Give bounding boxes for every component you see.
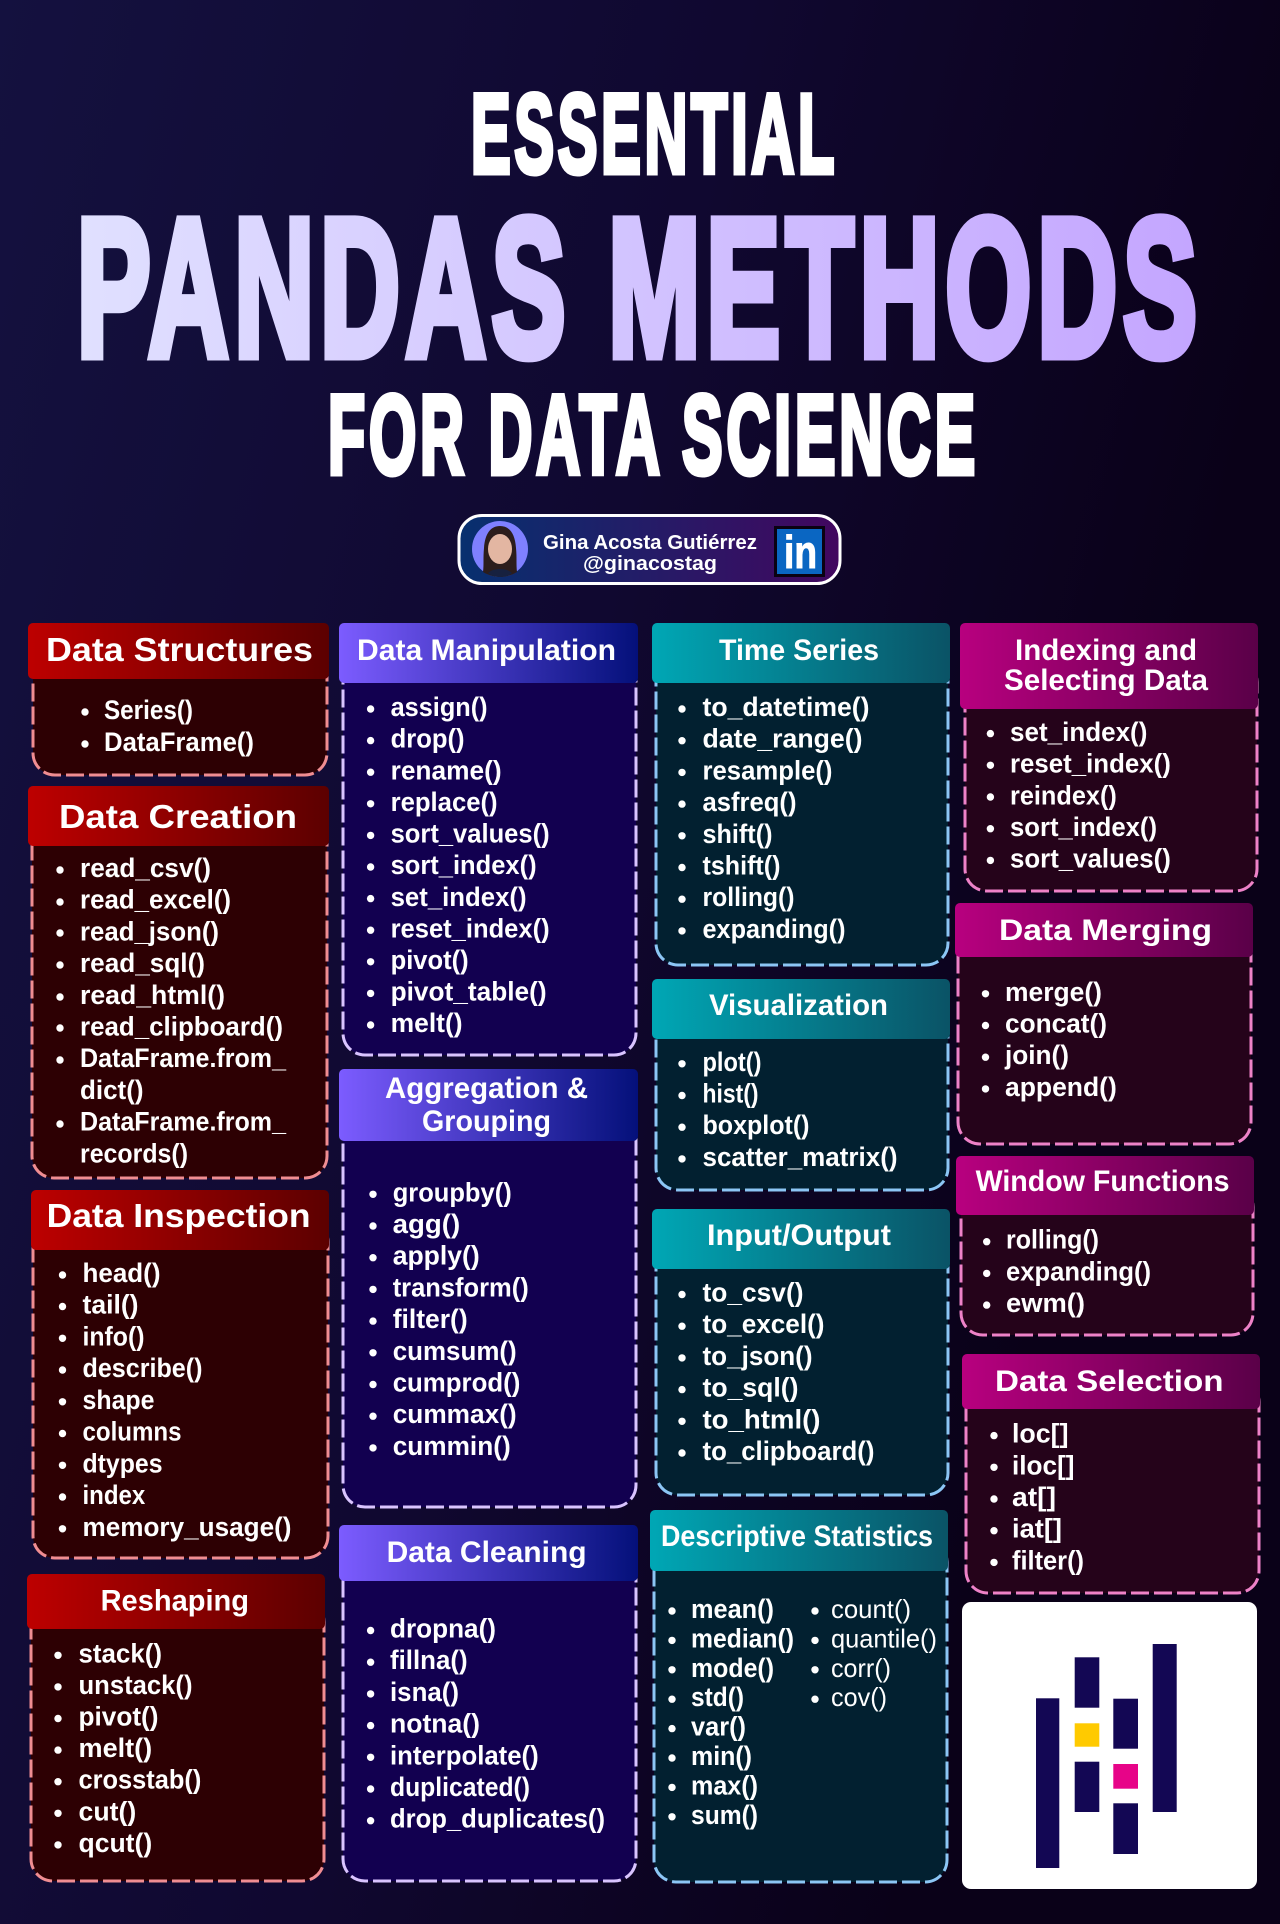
panel: Window Functions: [956, 1156, 1254, 1335]
heading: Data Structures: Data Structures: [46, 631, 313, 668]
method list: append(): [1005, 1072, 1117, 1102]
method list: DataFrame.from_: [80, 1043, 286, 1073]
method list: [367, 692, 550, 1038]
heading: Data Structures: [28, 623, 329, 679]
method list: column one: std(): [691, 1682, 744, 1712]
method list: DataFrame.from_: [80, 1107, 286, 1137]
method list: shift(): [702, 819, 772, 849]
panel: Data Selection: [962, 1354, 1260, 1593]
heading: Data Cleaning: [339, 1525, 638, 1581]
method list: records(): [80, 1138, 188, 1168]
method list: melt(): [78, 1733, 152, 1763]
method list: assign(): [391, 692, 488, 722]
heading: Data Selection: Data Selection: [995, 1365, 1224, 1398]
method list: [983, 1225, 1151, 1318]
author handle: @ginacostag: [583, 553, 717, 575]
heading: Data Manipulation: [339, 623, 638, 683]
method list: column two: count(): [831, 1594, 911, 1624]
method list: set_index(): [391, 882, 527, 912]
heading: Data Selection: [962, 1354, 1260, 1409]
method list: to_sql(): [702, 1373, 798, 1403]
method list: interpolate(): [390, 1740, 539, 1770]
method list: read_sql(): [80, 948, 205, 978]
method list: reindex(): [1010, 780, 1117, 810]
heading: Window Functions: Window Functions: [976, 1165, 1230, 1198]
method list: apply(): [393, 1241, 480, 1271]
method list: to_json(): [702, 1341, 812, 1371]
method list: read_json(): [80, 916, 219, 946]
panel: Data Manipulation: [339, 623, 638, 1055]
method list: to_excel(): [702, 1309, 824, 1339]
method list: column one: max(): [691, 1770, 758, 1800]
panel: Data Cleaning: [339, 1525, 638, 1881]
panel: Time Series: [652, 623, 950, 965]
method list: Series(): [104, 695, 193, 725]
method list: replace(): [391, 787, 498, 817]
method list: columns: [82, 1416, 182, 1446]
method list: describe(): [82, 1353, 202, 1383]
heading: Data Merging: [955, 903, 1253, 957]
method list: [990, 1419, 1084, 1575]
author badge: [459, 516, 840, 584]
method list: column two: cov(): [831, 1682, 887, 1712]
method list: [678, 692, 870, 944]
heading: Data Manipulation: Data Manipulation: [357, 634, 616, 667]
title line: ESSENTIAL: ESSENTIAL: [471, 72, 838, 196]
method list: cummin(): [393, 1431, 511, 1461]
method list: DataFrame(): [104, 727, 254, 757]
method list: stack(): [78, 1638, 162, 1668]
heading: Visualization: [652, 979, 950, 1039]
method list: qcut(): [78, 1828, 152, 1858]
method list: join(): [1004, 1040, 1069, 1070]
method list: crosstab(): [78, 1765, 201, 1795]
heading: Data Creation: [28, 786, 329, 846]
heading: Data Inspection: Data Inspection: [47, 1197, 311, 1234]
method list: drop_duplicates(): [390, 1804, 605, 1834]
method list: sort_values(): [391, 819, 550, 849]
method list: melt(): [391, 1008, 463, 1038]
method list: concat(): [1005, 1008, 1107, 1038]
method list: scatter_matrix(): [702, 1142, 898, 1172]
heading: Descriptive Statistics: Descriptive Statistics: [661, 1520, 933, 1553]
panel: Reshaping: [27, 1574, 325, 1881]
panel: Data Structures: [28, 623, 329, 775]
method list: to_csv(): [702, 1278, 804, 1308]
method list: dtypes: [82, 1448, 162, 1478]
method list: column one: [668, 1594, 794, 1830]
heading: Time Series: Time Series: [719, 634, 879, 667]
method list: [982, 977, 1117, 1102]
panel: Data Inspection: [31, 1190, 329, 1558]
method list: fillna(): [390, 1645, 468, 1675]
method list: date_range(): [702, 724, 862, 754]
method list: merge(): [1005, 977, 1102, 1007]
method list: head(): [82, 1258, 160, 1288]
method list: column one: median(): [691, 1623, 794, 1653]
method list: info(): [82, 1321, 144, 1351]
method list: cumsum(): [393, 1336, 517, 1366]
method list: iloc[]: [1012, 1450, 1074, 1480]
heading: Input/Output: [652, 1209, 950, 1269]
heading: Indexing and Selecting Data: [960, 623, 1258, 709]
icon: author avatar: [472, 521, 528, 577]
method list: reset_index(): [391, 913, 550, 943]
method list: column one: sum(): [691, 1800, 758, 1830]
method list: loc[]: [1012, 1419, 1068, 1449]
method list: read_html(): [80, 980, 225, 1010]
method list: read_excel(): [80, 885, 231, 915]
heading: Aggregation and Grouping: Aggregation &: [385, 1072, 588, 1105]
method list: expanding(): [1006, 1256, 1151, 1286]
method list: column two: [811, 1594, 937, 1712]
panel: Indexing and Selecting Data: [960, 623, 1258, 891]
heading: Window Functions: [956, 1156, 1254, 1215]
method list: at[]: [1012, 1482, 1056, 1512]
method list: dropna(): [390, 1614, 496, 1644]
heading: Reshaping: Reshaping: [101, 1584, 249, 1618]
method list: sort_index(): [391, 850, 537, 880]
method list: filter(): [393, 1304, 468, 1334]
panel: Input/Output: [652, 1209, 950, 1495]
method list: drop(): [391, 724, 465, 754]
heading: Time Series: [652, 623, 950, 683]
heading: Aggregation and Grouping: [339, 1069, 638, 1141]
method list: ewm(): [1006, 1288, 1085, 1318]
method list: read_clipboard(): [80, 1012, 283, 1042]
method list: [59, 1258, 291, 1542]
method list: shape: [82, 1385, 154, 1415]
method list: rolling(): [702, 882, 794, 912]
method list: cut(): [78, 1796, 136, 1826]
method list: notna(): [390, 1709, 480, 1739]
title: [77, 72, 1203, 498]
method list: reset_index(): [1010, 749, 1171, 779]
method list: column two: quantile(): [831, 1623, 937, 1653]
method list: [81, 695, 254, 757]
method list: groupby(): [393, 1177, 512, 1207]
panel: Aggregation and Grouping: [339, 1069, 638, 1507]
method list: duplicated(): [390, 1772, 530, 1802]
panel: Descriptive Statistics: [650, 1510, 948, 1882]
method list: to_datetime(): [702, 692, 870, 722]
method list: column one: mode(): [691, 1653, 774, 1683]
method list: boxplot(): [702, 1110, 810, 1140]
method list: [54, 1638, 201, 1858]
method list: isna(): [390, 1677, 459, 1707]
heading: Visualization: Visualization: [709, 989, 888, 1022]
method list: [367, 1614, 605, 1834]
method list: asfreq(): [702, 787, 796, 817]
heading: Input/Output: Input/Output: [707, 1219, 891, 1252]
method list: column one: mean(): [691, 1594, 774, 1624]
method list: tail(): [82, 1290, 138, 1320]
icon: pandas logo: [962, 1602, 1257, 1889]
method list: pivot_table(): [391, 977, 547, 1007]
method list: dict(): [80, 1075, 144, 1105]
method list: [56, 853, 286, 1168]
method list: resample(): [702, 755, 832, 785]
heading: Data Creation: Data Creation: [59, 798, 297, 835]
method list: unstack(): [78, 1670, 192, 1700]
method list: to_clipboard(): [702, 1436, 874, 1466]
method list: plot(): [702, 1047, 762, 1077]
method list: tshift(): [702, 850, 780, 880]
method list: pivot(): [78, 1702, 158, 1732]
heading: Aggregation and Grouping: Grouping: [422, 1105, 551, 1138]
method list: iat[]: [1012, 1514, 1062, 1544]
method list: column two: corr(): [831, 1653, 891, 1683]
method list: rolling(): [1006, 1225, 1099, 1255]
method list: to_html(): [702, 1404, 820, 1434]
heading: Indexing and Selecting Data: Selecting Data: [1004, 664, 1208, 697]
method list: [678, 1278, 874, 1466]
method list: rename(): [391, 755, 502, 785]
method list: pivot(): [391, 945, 469, 975]
method list: index: [82, 1480, 146, 1510]
method list: read_csv(): [80, 853, 211, 883]
method list: cummax(): [393, 1399, 517, 1429]
heading: Indexing and Selecting Data: Indexing and: [1015, 634, 1197, 667]
heading: Data Inspection: [31, 1190, 329, 1250]
heading: Reshaping: [27, 1574, 325, 1629]
method list: agg(): [393, 1209, 460, 1239]
panel: Visualization: [652, 979, 950, 1190]
panel: Data Creation: [28, 786, 329, 1178]
author name: Gina Acosta Gutiérrez: [543, 532, 757, 554]
method list: [987, 717, 1171, 874]
method list: sort_values(): [1010, 844, 1171, 874]
method list: transform(): [393, 1272, 529, 1302]
method list: [678, 1047, 898, 1172]
method list: column one: min(): [691, 1741, 752, 1771]
method list: expanding(): [702, 914, 846, 944]
method list: cumprod(): [393, 1368, 520, 1398]
method list: hist(): [702, 1078, 758, 1108]
method list: set_index(): [1010, 717, 1147, 747]
icon: LinkedIn: in: [784, 526, 817, 578]
method list: column one: var(): [691, 1712, 746, 1742]
method list: filter(): [1012, 1545, 1084, 1575]
method list: [369, 1177, 529, 1461]
method list: memory_usage(): [82, 1512, 292, 1542]
panel: Data Merging: [955, 903, 1253, 1144]
method list: sort_index(): [1010, 812, 1157, 842]
heading: Descriptive Statistics: [650, 1510, 948, 1571]
heading: Data Merging: Data Merging: [999, 914, 1212, 947]
heading: Data Cleaning: Data Cleaning: [387, 1536, 587, 1569]
